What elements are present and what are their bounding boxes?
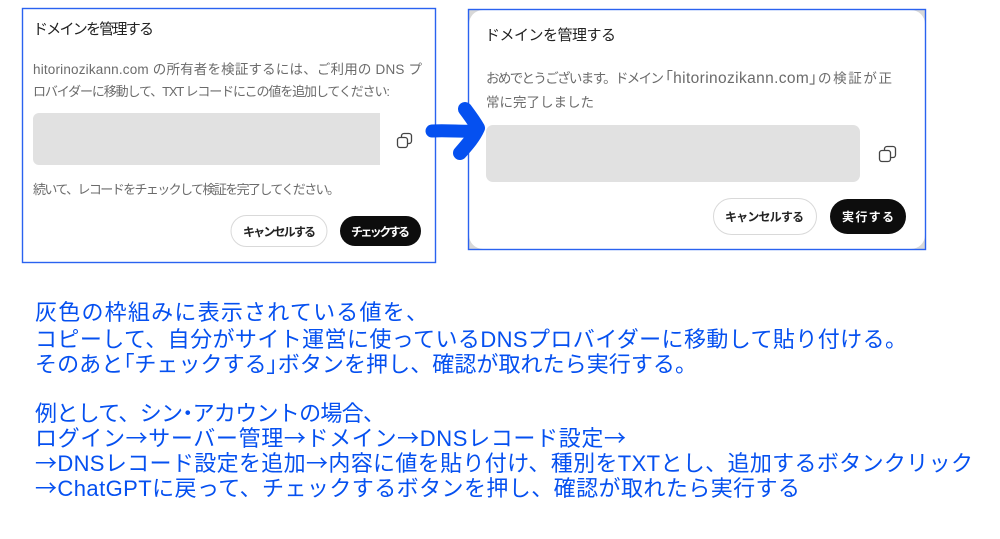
grey value box	[486, 125, 860, 182]
panel: verification request dialog	[22, 8, 436, 262]
explanation: Xserver account example: 例として、シン・アカウントの場合、	[35, 396, 385, 428]
explanation: Xserver account example: ログイン→サーバー管理→ドメイン→DNSレコード設定→	[35, 421, 626, 453]
explanation: how to copy the value: 灰色の枠組みに表示されている値を、	[35, 295, 428, 327]
button: execute	[830, 199, 906, 234]
explanation: how to copy the value: そのあと「チェックする」ボタンを押し、確認が取れたら実行する。	[35, 347, 697, 379]
dialog heading: ドメインを管理する	[485, 26, 616, 44]
success message	[486, 69, 892, 110]
success message: 「hitorinozikann.com」	[665, 69, 817, 87]
button: check: チェックする	[351, 225, 410, 239]
button: cancel	[714, 198, 816, 234]
instruction text	[33, 62, 422, 99]
button: cancel: キャンセルする	[725, 210, 804, 224]
explanation: how to copy the value: コピーして、自分がサイト運営に使っているDNSプロバイダーに移動して貼り付ける。	[35, 322, 907, 354]
success message: の検証が正	[818, 71, 892, 86]
instruction text: hitorinozikann.com の所有者を検証するには、ご利用の DNS プ	[33, 62, 422, 77]
button: cancel: キャンセルする	[243, 225, 316, 239]
button: cancel	[231, 216, 327, 246]
explanation: Xserver account example: →DNSレコード設定を追加→内容に値を貼り付け、種別をTXTとし、追加するボタンクリック	[35, 446, 973, 478]
panel: verification complete dialog	[468, 10, 926, 250]
icon: copy	[398, 134, 412, 148]
instruction text: ロバイダーに移動して、TXT レコードにこの値を追加してください:	[33, 84, 390, 99]
button: check	[340, 216, 421, 246]
grey value box	[33, 113, 380, 165]
follow-up instruction: 続いて、レコードをチェックして検証を完了してください。	[33, 182, 340, 197]
success message: 常に完了しました	[486, 95, 594, 110]
arrow: before to after	[432, 109, 478, 153]
explanation: how to copy the value	[35, 295, 907, 379]
explanation: Xserver account example: →ChatGPTに戻って、チェックするボタンを押し、確認が取れたら実行する	[35, 471, 800, 503]
explanation: Xserver account example	[35, 396, 973, 503]
success message: おめでとうございます。ドメイン	[486, 70, 664, 86]
icon: copy	[880, 146, 896, 162]
dialog heading: ドメインを管理する	[33, 20, 154, 38]
button: execute: 実行する	[842, 209, 894, 224]
